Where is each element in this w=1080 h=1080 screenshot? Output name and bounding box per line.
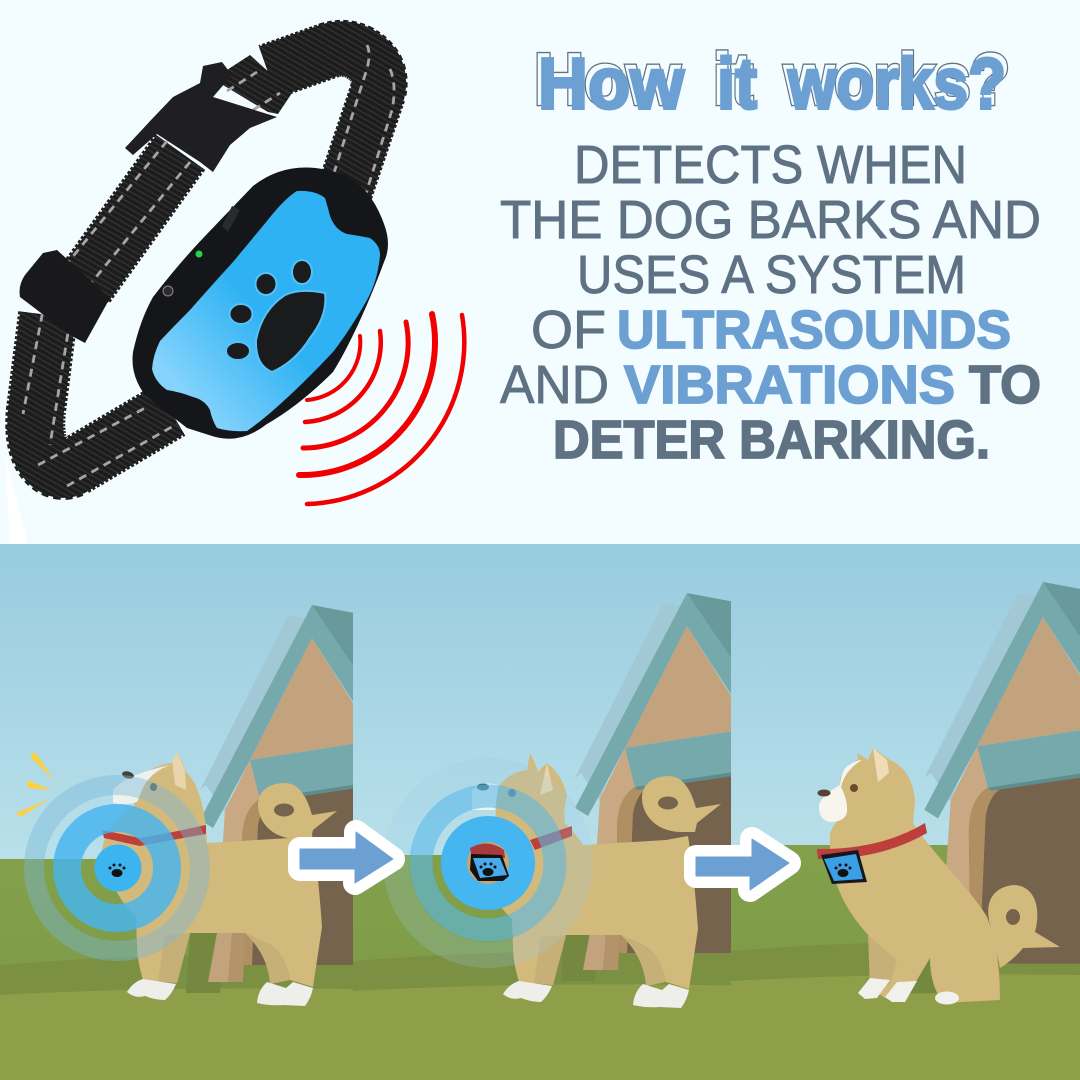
strap: middle section <box>84 152 180 286</box>
title fill layer: it <box>717 44 757 124</box>
background <box>0 0 1080 544</box>
description text: OF <box>531 300 606 360</box>
description text: ULTRASOUNDS <box>617 300 1011 360</box>
strap keeper loop <box>20 250 110 343</box>
arrow: step 1 to 2 <box>300 832 393 883</box>
description text: TO <box>969 355 1041 415</box>
dog body <box>502 823 698 1008</box>
dog tail <box>988 885 1060 968</box>
green LED <box>196 250 202 258</box>
middle signal ring <box>67 818 167 918</box>
doghouse <box>186 605 365 993</box>
title fill layer: works? <box>787 44 1006 124</box>
title fill layer <box>538 44 1006 124</box>
title outline layer: How <box>534 40 681 120</box>
title <box>534 40 1010 124</box>
eye <box>850 784 858 792</box>
strap: buckle section <box>213 55 292 114</box>
dog muzzle <box>819 760 862 822</box>
panel: dog barking <box>0 544 353 1080</box>
strap: fold corner <box>5 420 77 497</box>
device housing <box>132 168 388 439</box>
white paws <box>858 978 959 1004</box>
white light wedge <box>5 455 28 544</box>
red collar <box>530 826 572 850</box>
bark lines <box>16 752 54 817</box>
dog body <box>830 748 1000 1003</box>
panel: collar reacts <box>353 544 753 1080</box>
dog head <box>472 753 567 824</box>
product: bark collar <box>5 45 394 497</box>
arrow: step 2 to 3 <box>696 839 789 890</box>
description text: AND <box>500 355 609 415</box>
inner signal disc <box>441 816 535 910</box>
title outline inner layer <box>534 40 1010 120</box>
title outline layer: it <box>713 40 753 120</box>
grass <box>353 855 753 1080</box>
grass <box>731 845 1080 1080</box>
description text: DETER BARKING. <box>553 410 990 470</box>
title outline layer: works? <box>783 40 1010 120</box>
description text: VIBRATIONS <box>624 355 955 415</box>
title outline inner layer: How <box>534 40 681 120</box>
side button <box>222 206 240 232</box>
sound waves <box>299 314 464 504</box>
strap stitching <box>23 45 394 486</box>
panel: dog calm <box>731 544 1080 1080</box>
strap: upper right <box>268 48 379 190</box>
buckle <box>125 62 277 172</box>
faint signal ring <box>396 771 580 955</box>
title outline layer <box>534 40 1010 120</box>
collar device <box>821 850 867 884</box>
doghouse <box>909 582 1080 993</box>
red collar <box>817 823 927 859</box>
dog head <box>113 753 207 845</box>
power button <box>163 286 173 296</box>
description text <box>500 135 1041 470</box>
dog body <box>102 804 322 1006</box>
sky <box>353 544 731 864</box>
description text: DETECTS WHEN <box>574 135 967 195</box>
title outline inner layer: works? <box>783 40 1010 120</box>
far leg shade <box>868 935 897 987</box>
red collar <box>102 825 206 846</box>
description text: USES A SYSTEM <box>577 245 966 305</box>
ear <box>873 748 889 782</box>
paw print <box>226 260 325 372</box>
dog tail <box>258 783 337 839</box>
title fill layer: How <box>538 44 685 124</box>
outer signal ring <box>34 785 200 951</box>
nose <box>818 790 830 796</box>
device blue face <box>152 191 380 431</box>
strap: lower loop <box>35 315 170 470</box>
tail hole <box>1006 909 1020 925</box>
description text: THE DOG BARKS AND <box>500 190 1041 250</box>
paw icon <box>108 864 126 877</box>
collar device glow <box>94 844 142 892</box>
grass <box>0 859 353 1080</box>
sky <box>0 544 353 864</box>
dog tail <box>642 776 721 832</box>
doghouse <box>561 593 740 981</box>
middle signal ring <box>421 796 555 930</box>
collar device <box>467 842 509 884</box>
title outline inner layer: it <box>713 40 753 120</box>
sky <box>731 544 1080 849</box>
